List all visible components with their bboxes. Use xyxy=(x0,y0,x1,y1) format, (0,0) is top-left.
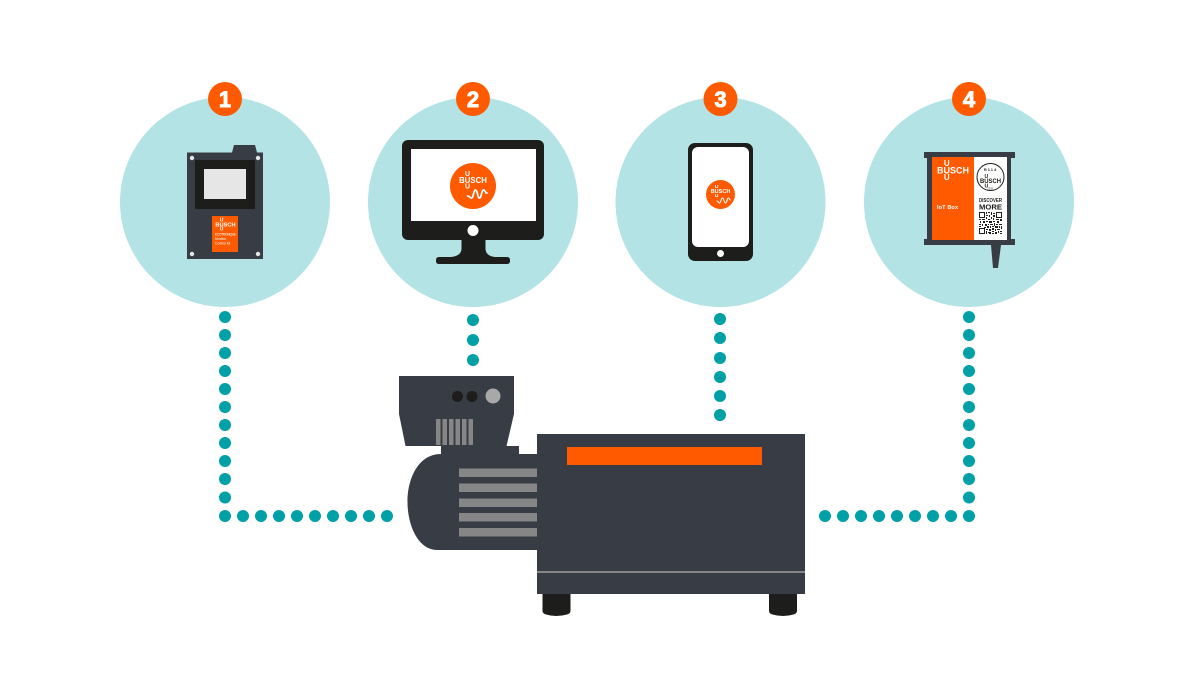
dotted connector 1 xyxy=(219,311,393,522)
icon: smartphone xyxy=(688,143,753,261)
badge 2 xyxy=(456,82,490,116)
badge 3 xyxy=(704,82,738,116)
badge 4: 4 xyxy=(963,87,976,112)
panel: step 3 smartphone xyxy=(616,82,826,307)
panel: step 2 monitor xyxy=(368,82,578,307)
badge 4 xyxy=(952,82,986,116)
background circle 3 xyxy=(616,97,826,307)
icon: IoT box: MORE xyxy=(979,202,1002,212)
panel: step 4 IoT box xyxy=(864,82,1074,307)
pump feet xyxy=(542,590,797,616)
badge 3: 3 xyxy=(714,87,727,112)
icon: QR code xyxy=(979,212,1002,234)
icon: IoT box: IoT Box xyxy=(937,205,959,211)
dotted connector 4 xyxy=(819,311,975,522)
icon: IoT box: R114 xyxy=(984,167,997,172)
icon: control cabinet: Monitor xyxy=(215,237,227,241)
icon: desktop monitor xyxy=(402,140,544,264)
icon: IoT box: 2021 xyxy=(987,186,994,190)
dotted connector 3 xyxy=(714,313,726,421)
badge 2: 2 xyxy=(467,87,479,112)
icon: control cabinet: ECOTRONIQUE xyxy=(215,232,237,236)
background circle 2 xyxy=(368,97,578,307)
panel: step 1 control panel xyxy=(120,82,330,307)
icon: control cabinet: Control kit xyxy=(215,242,230,246)
background circle 1 xyxy=(120,97,330,307)
badge 1 xyxy=(208,82,242,116)
icon: control cabinet xyxy=(187,145,263,259)
background circle 4 xyxy=(864,97,1074,307)
pump housing xyxy=(537,434,805,594)
motor terminal box xyxy=(399,376,514,446)
icon: IoT box: DISCOVER xyxy=(979,198,1002,204)
badge 1: 1 xyxy=(219,87,231,112)
motor body xyxy=(408,446,538,550)
vacuum pump machine xyxy=(399,376,805,616)
dotted connector 2 xyxy=(467,314,479,366)
icon: IoT box xyxy=(924,152,1015,268)
